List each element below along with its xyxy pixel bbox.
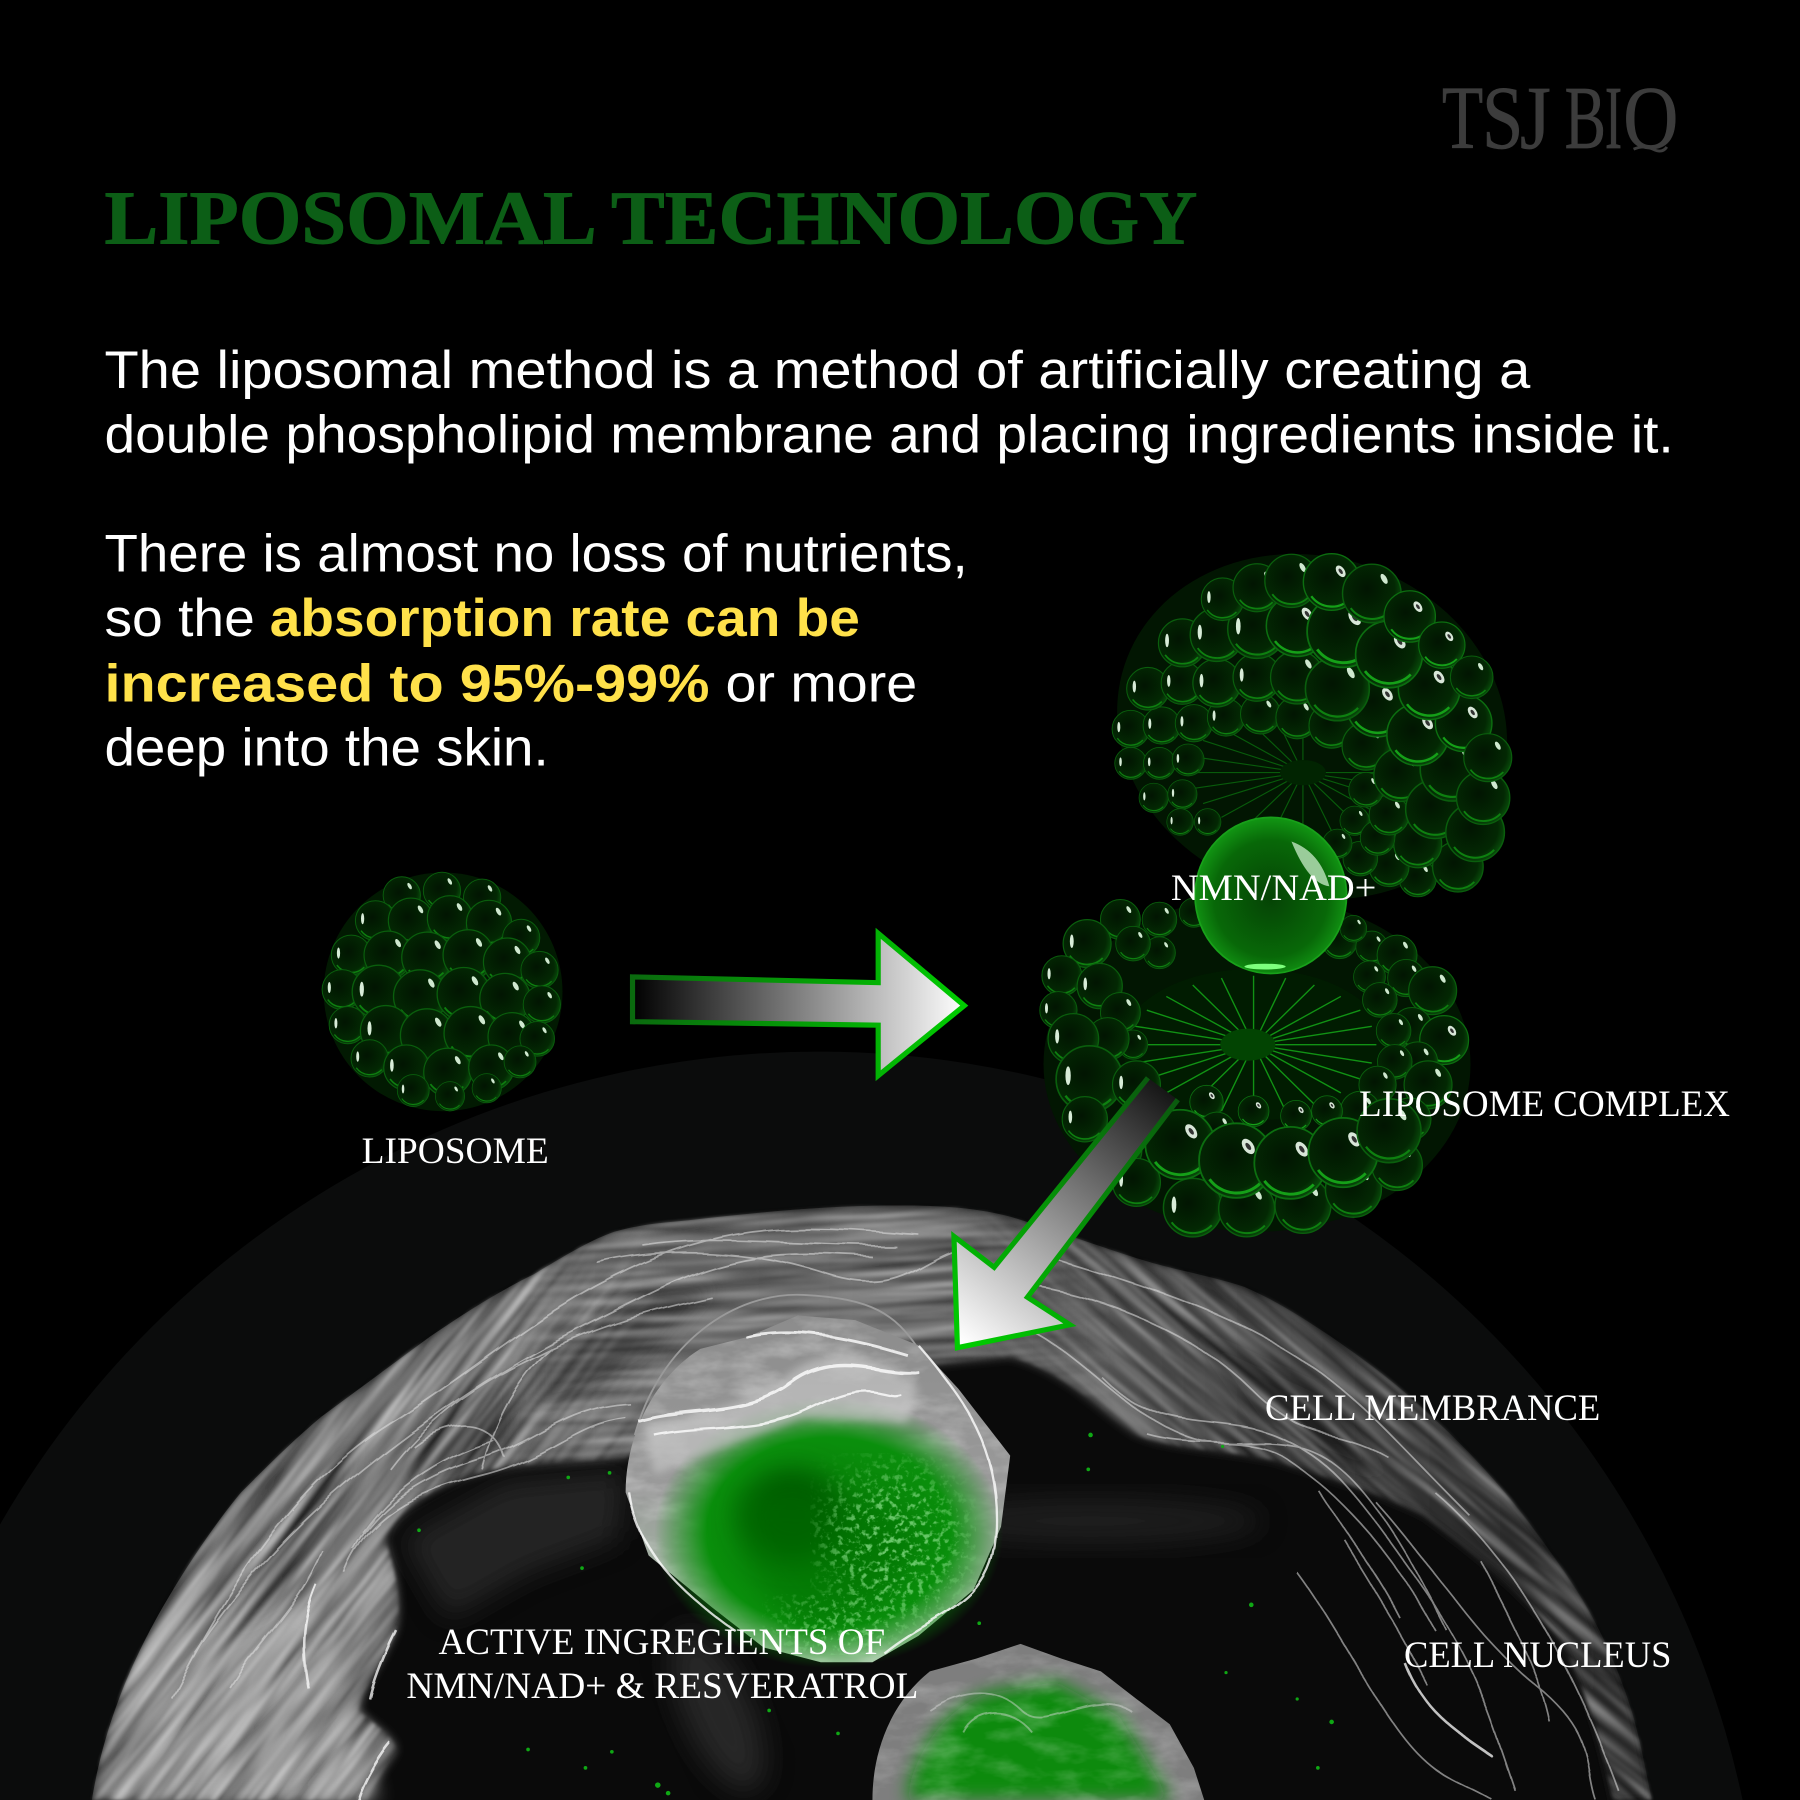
green specks xyxy=(417,1433,1334,1795)
absorption paragraph: or more xyxy=(726,654,917,713)
membrane fibres xyxy=(172,1228,1619,1800)
logo: I xyxy=(1605,69,1622,168)
cell body backdrop xyxy=(0,1052,1743,1800)
cell interior glow xyxy=(408,1469,1244,1792)
logo: B xyxy=(1565,69,1606,168)
intro paragraph: The liposomal method is a method of artificially creating a xyxy=(104,341,1531,400)
membrane fibre texture left xyxy=(91,1245,646,1800)
NMN/NAD+ ball xyxy=(1195,817,1347,973)
interior bright shreds xyxy=(303,1584,1492,1800)
absorption paragraph: deep into the skin. xyxy=(104,719,549,778)
absorption paragraph: increased to 95%-99% xyxy=(104,654,709,713)
membrane fibre texture right xyxy=(1005,1222,1654,1800)
absorption paragraph: so the xyxy=(104,589,255,648)
cell illustration xyxy=(0,1052,1743,1800)
label: active ingredients: NMN/NAD+ & RESVERATROL xyxy=(406,1666,918,1707)
arrow to liposome complex xyxy=(633,933,964,1076)
absorption paragraph: absorption rate can be xyxy=(270,589,860,648)
top half liposome shell xyxy=(1072,504,1552,949)
label: liposome complex: LIPOSOME COMPLEX xyxy=(1359,1084,1730,1125)
absorption paragraph xyxy=(104,525,968,778)
membrane fibre texture top xyxy=(524,1205,1094,1458)
title: LIPOSOMAL TECHNOLOGY xyxy=(104,176,1197,260)
membrane bright thick patch xyxy=(126,1596,379,1800)
logo: J xyxy=(1520,69,1551,168)
logo xyxy=(1442,69,1678,168)
label: cell nucleus: CELL NUCLEUS xyxy=(1404,1635,1671,1676)
arrow to cell xyxy=(954,1078,1178,1348)
label: NMN/NAD+: NMN/NAD+ xyxy=(1171,868,1376,909)
label: active ingredients: ACTIVE INGREGIENTS OF xyxy=(439,1622,885,1663)
organelle: large liposome merging with cell xyxy=(626,1295,1010,1668)
label: cell membrane: CELL MEMBRANCE xyxy=(1265,1388,1600,1429)
organelle: second liposome xyxy=(872,1644,1204,1800)
bottom half liposome shell xyxy=(1040,897,1471,1237)
liposome sphere xyxy=(322,872,562,1111)
membrane dark folds xyxy=(233,1282,1381,1634)
logo: S xyxy=(1482,69,1523,168)
intro paragraph xyxy=(104,341,1674,464)
label: liposome: LIPOSOME xyxy=(362,1131,549,1172)
label: active ingredients xyxy=(406,1622,918,1707)
logo: T xyxy=(1442,69,1483,168)
cell membrane xyxy=(92,1205,1652,1800)
absorption paragraph: There is almost no loss of nutrients, xyxy=(104,525,968,584)
intro paragraph: double phospholipid membrane and placing ingredients inside it. xyxy=(104,405,1674,464)
logo: O xyxy=(1623,69,1678,168)
